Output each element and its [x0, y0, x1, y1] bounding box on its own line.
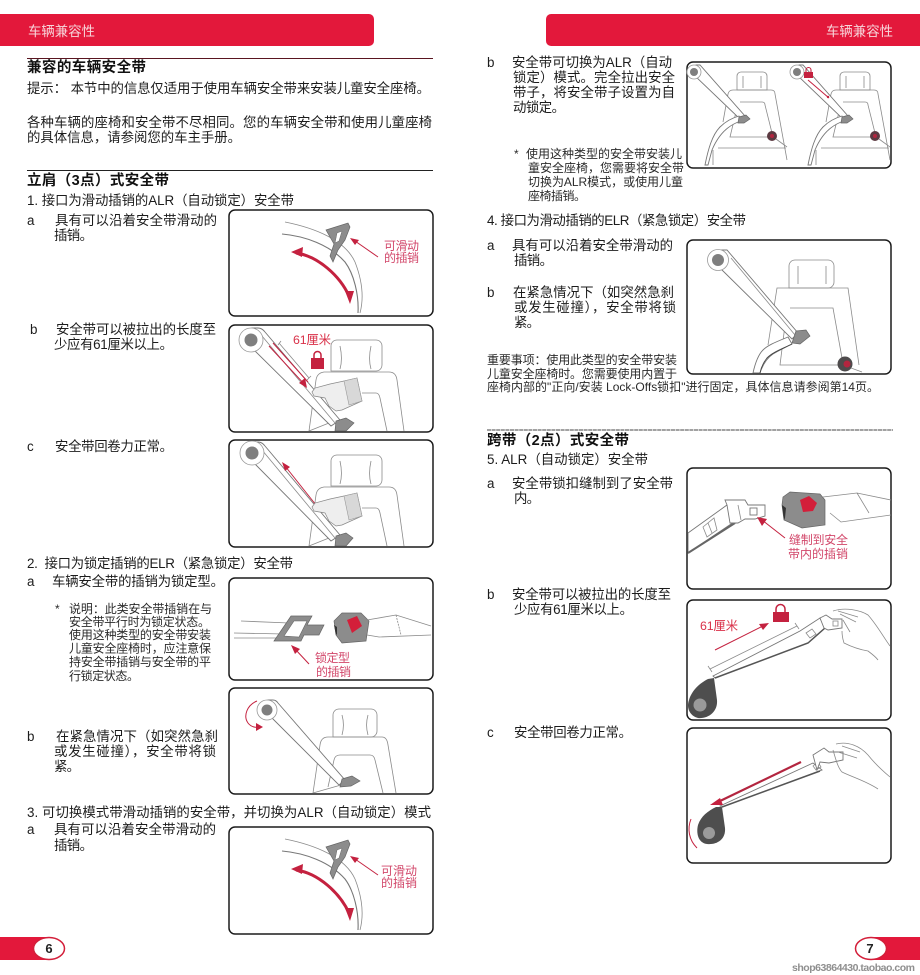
illustration panel: locking latch plate — [229, 578, 433, 680]
text block: 5a — [487, 475, 673, 506]
text block: 3b note: 座椅插销。 — [528, 188, 586, 203]
text block: 2b: 在紧急情况下（如突然急刹 — [56, 728, 218, 744]
illustration panel: sliding latch plate: 可滑动 — [384, 239, 419, 253]
text block: 2a note: 儿童安全座椅时，应注意保 — [69, 640, 211, 656]
header bar: right: 车辆兼容性 — [826, 23, 893, 39]
text block: 5a: 安全带锁扣缝制到了安全带 — [512, 475, 673, 491]
text block: 4b: b — [487, 285, 494, 300]
text block: 3b: 带子，将安全带子设置为自 — [513, 84, 675, 100]
page 6: left page — [0, 14, 433, 960]
text block: 1a: 插销。 — [54, 228, 93, 243]
illustration panel: belt pulled out 61 cm: 61厘米 — [293, 333, 331, 347]
heading: 2-point belts: 跨带（2点）式安全带 — [487, 431, 629, 449]
text block: 2a: a — [27, 574, 35, 589]
text block: 2a note: 安全带平行时为锁定状态。 — [69, 614, 210, 629]
text block: 2b: 紧。 — [54, 759, 80, 774]
text block: 4a — [487, 237, 673, 268]
text block: 5a: a — [487, 476, 495, 491]
text block: 3b note: * — [514, 147, 519, 161]
text block: 2b — [27, 728, 218, 774]
text block: 3b: 安全带可切换为ALR（自动 — [512, 54, 672, 70]
text block: 3b note: 童安全座椅，您需要将安全带 — [528, 160, 684, 175]
footer: page number 7: 7 — [866, 941, 874, 956]
text block: 1c: c — [27, 439, 34, 454]
text block: 1b — [30, 321, 216, 352]
text block: 1a: a — [27, 213, 35, 228]
illustration panel: latch plate sewn into belt: 带内的插销 — [788, 546, 848, 561]
text block: 3b: b — [487, 55, 494, 70]
text block: 1a — [27, 212, 217, 243]
text block: 4b: 或发生碰撞），安全带将锁 — [514, 299, 676, 315]
text block: 5c: c — [487, 725, 494, 740]
text block: owner manual note: 的具体信息，请参阅您的车主手册。 — [27, 129, 241, 145]
text block: 4b: 在紧急情况下（如突然急刹 — [513, 284, 674, 300]
illustration panel: switching to ALR mode — [687, 62, 891, 168]
illustration panel: sliding latch plate: 的插销 — [384, 250, 419, 265]
text block: 1a: 具有可以沿着安全带滑动的 — [55, 212, 217, 228]
text block: 2a note: * — [55, 602, 60, 616]
text block: 3b: 锁定）模式。完全拉出安全 — [513, 69, 676, 85]
text block: 5a: 内。 — [514, 491, 540, 506]
text block: 4b — [487, 284, 676, 330]
text block: owner manual note: 各种车辆的座椅和安全带不尽相同。您的车辆安全带和使用儿童座椅 — [27, 114, 432, 130]
callout: important note: 重要事项：使用此类型的安全带安装 — [487, 352, 677, 367]
text block: 3b — [487, 54, 676, 115]
subheading: item 4: 4. 接口为滑动插销的ELR（紧急锁定）安全带 — [487, 212, 746, 228]
header bar: left — [0, 14, 374, 46]
text block: 2b: 或发生碰撞），安全带将锁 — [54, 743, 216, 759]
footer: page number 6: 6 — [45, 941, 53, 956]
text block: 2a note: 使用这种类型的安全带安装 — [69, 627, 211, 642]
text block: 5b: 安全带可以被拉出的长度至 — [512, 586, 671, 602]
watermark: shop63864430.taobao.com — [792, 962, 915, 974]
callout: important note: 座椅内部的"正向/安装 Lock-Offs锁扣"进行固定，具体信息请参阅第14页。 — [487, 379, 879, 394]
text block: 1b: 安全带可以被拉出的长度至 — [56, 321, 216, 337]
illustration panel: latch plate sewn into belt: 缝制到安全 — [789, 532, 848, 547]
text block: 3a — [27, 821, 216, 853]
subheading: item 5: 5. ALR（自动锁定）安全带 — [487, 451, 648, 467]
subheading: item 2: 2. 接口为锁定插销的ELR（紧急锁定）安全带 — [27, 555, 293, 571]
footer: page number 6 — [0, 937, 64, 960]
text block: 2a note — [55, 601, 212, 683]
callout: important note: 儿童安全座椅时。您需要使用内置于 — [487, 366, 677, 381]
illustration panel: belt retracts — [229, 440, 433, 547]
header bar: right — [546, 14, 920, 46]
text block: 4a: a — [487, 238, 495, 253]
text block: 3a: 插销。 — [54, 838, 93, 853]
text block: 2a note: 说明：此类安全带插销在与 — [69, 601, 212, 616]
text block: 3a: 具有可以沿着安全带滑动的 — [54, 821, 216, 837]
header bar: left: 车辆兼容性 — [28, 23, 95, 39]
illustration panel: locking latch plate: 锁定型 — [315, 650, 350, 665]
illustration panel: retractor locks in emergency — [229, 688, 433, 794]
text block: 5b — [487, 586, 671, 617]
page 7: right page — [487, 14, 920, 974]
text block: 5c: 安全带回卷力正常。 — [514, 724, 632, 740]
text block: 3b note — [514, 146, 684, 203]
text block: 1b: b — [30, 322, 37, 337]
illustration panel: lap belt retracts — [687, 728, 891, 863]
text block: 3b: 动锁定。 — [513, 100, 565, 115]
footer: page number 7 — [856, 937, 920, 960]
text block: 5b: b — [487, 587, 494, 602]
illustration panel: switchable sliding latch plate: 可滑动 — [381, 864, 417, 878]
heading: 3-point belts: 立肩（3点）式安全带 — [27, 171, 169, 189]
illustration panel: sliding latch plate — [229, 210, 433, 316]
illustration panel: belt pulled out 61 cm — [229, 325, 433, 432]
illustration panel: ELR with sliding latch — [687, 240, 891, 374]
text block: 1c: 安全带回卷力正常。 — [55, 438, 173, 454]
illustration panel: locking latch plate: 的插销 — [316, 664, 351, 679]
text block: 3b note: 切换为ALR模式，或使用儿童 — [528, 174, 683, 189]
text block: 4a: 具有可以沿着安全带滑动的 — [512, 237, 673, 253]
text block: 5b: 少应有61厘米以上。 — [514, 601, 633, 617]
text block: 2a note: 行锁定状态。 — [69, 668, 139, 683]
text block: 4b: 紧。 — [514, 315, 540, 330]
text block: 2a: 车辆安全带的插销为锁定型。 — [52, 573, 224, 589]
illustration panel: latch plate sewn into belt — [687, 468, 891, 589]
callout: important note — [487, 352, 879, 394]
text block: 4a: 插销。 — [514, 253, 553, 268]
illustration panel: lap belt pulled 61 cm — [687, 600, 891, 720]
heading: compatible vehicle belts: 兼容的车辆安全带 — [27, 58, 146, 76]
text block: 2b: b — [27, 729, 34, 744]
text block: 1b: 少应有61厘米以上。 — [54, 336, 173, 352]
illustration panel: lap belt pulled 61 cm: 61厘米 — [700, 619, 738, 633]
text block: tip: 提示： 本节中的信息仅适用于使用车辆安全带来安装儿童安全座椅。 — [27, 80, 430, 96]
illustration panel: switchable sliding latch plate: 的插销 — [381, 875, 417, 890]
subheading: item 3: 3. 可切换模式带滑动插销的安全带，并切换为ALR（自动锁定）模式 — [27, 804, 431, 820]
subheading: item 1: 1. 接口为滑动插销的ALR（自动锁定）安全带 — [27, 192, 294, 208]
text block: 2a note: 持安全带插销与安全带的平 — [69, 654, 211, 669]
text block: 3a: a — [27, 822, 35, 837]
illustration panel: switchable sliding latch plate — [229, 827, 433, 934]
text block: owner manual note — [27, 114, 432, 145]
text block: 3b note: 使用这种类型的安全带安装儿 — [526, 146, 682, 161]
